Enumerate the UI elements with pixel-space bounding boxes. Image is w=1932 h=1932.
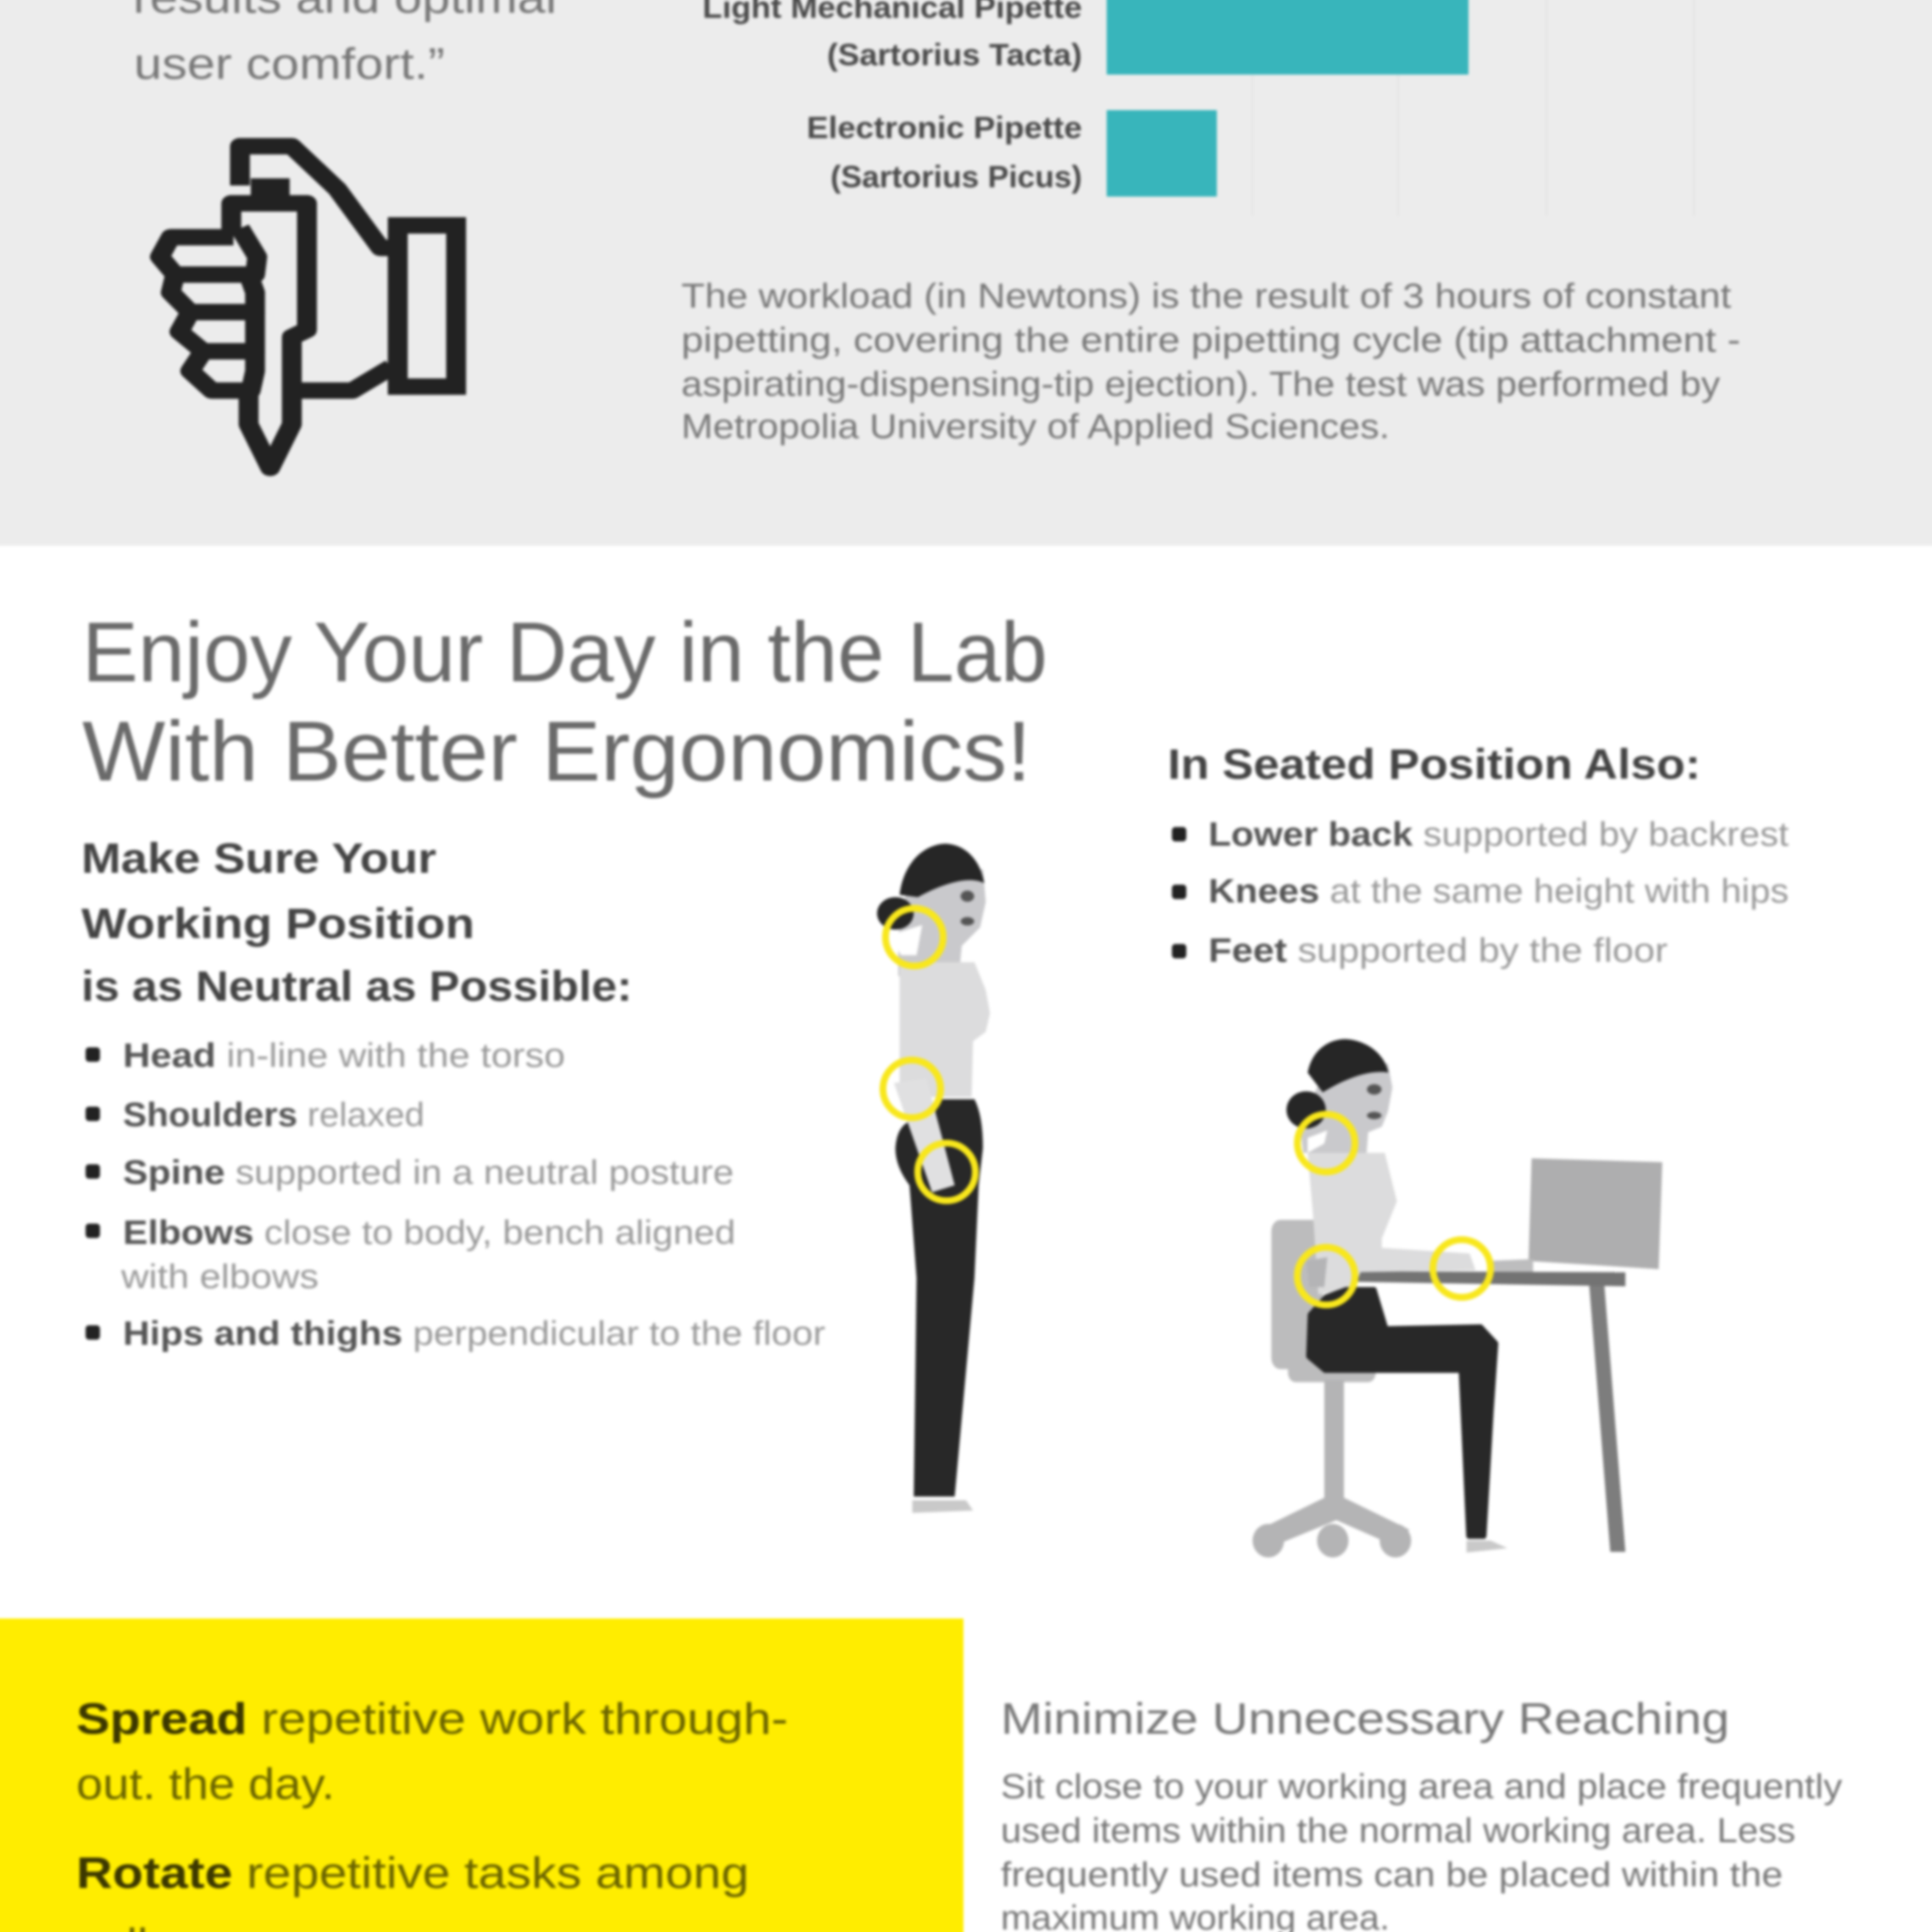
subheading: neutral working position: Make Sure Your xyxy=(81,835,436,882)
chart footnote paragraph: pipetting, covering the entire pipetting cycle (tip attachment - xyxy=(681,320,1740,359)
bar: electronic pipette xyxy=(1107,110,1217,197)
illustration: seated figure at desk xyxy=(1252,1039,1663,1557)
bar: light mechanical pipette xyxy=(1107,0,1468,75)
bar chart: workload in Newtons xyxy=(702,0,1694,216)
heading: Enjoy Your Day in the Lab xyxy=(82,605,1047,799)
illustration: standing figure xyxy=(877,844,990,1513)
list: neutral position checklist: with elbows xyxy=(120,1258,319,1296)
desk xyxy=(1589,1283,1625,1552)
tips text: Spread repetitive work through- xyxy=(76,1695,788,1744)
list: neutral position checklist: Elbows close to body, bench aligned xyxy=(123,1214,736,1252)
list: neutral position checklist: Hips and thighs perpendicular to the floor xyxy=(123,1315,825,1352)
tips text: Rotate repetitive tasks among xyxy=(76,1849,749,1898)
bar labels xyxy=(702,0,1082,194)
body xyxy=(1300,1063,1392,1152)
chart footnote paragraph: aspirating-dispensing-tip ejection). The test was performed by xyxy=(681,364,1721,403)
panel: minimize reaching xyxy=(1001,1695,1843,1932)
tips text xyxy=(76,1695,788,1932)
laptop xyxy=(1529,1158,1663,1269)
section paragraph: Sit close to your working area and place frequently xyxy=(1001,1767,1843,1806)
marker rings xyxy=(1297,1114,1491,1305)
list: neutral position checklist: Head in-line with the torso xyxy=(123,1037,565,1074)
subheading: seated position: In Seated Position Also: xyxy=(1168,741,1701,788)
panel: pipette comparison xyxy=(0,0,1932,546)
list: neutral position checklist: Spine supported in a neutral posture xyxy=(123,1154,734,1191)
chart footnote paragraph xyxy=(681,276,1740,446)
chart footnote paragraph: The workload (in Newtons) is the result of 3 hours of constant xyxy=(681,276,1732,315)
bar labels: Electronic Pipette xyxy=(807,110,1082,145)
panel: repetitive work tips xyxy=(0,1618,963,1932)
list: seated position checklist: Lower back supported by backrest xyxy=(1208,816,1789,853)
section heading: Minimize Unnecessary Reaching xyxy=(1001,1695,1729,1744)
chair xyxy=(1252,1220,1411,1557)
subheading: neutral working position xyxy=(81,835,632,1010)
quote text xyxy=(133,0,557,89)
list: seated position checklist: Knees at the same height with hips xyxy=(1208,873,1789,910)
section paragraph: frequently used items can be placed within the xyxy=(1001,1855,1783,1894)
section paragraph xyxy=(1001,1767,1843,1932)
list: neutral position checklist xyxy=(86,1037,825,1352)
icon: hand holding pipette xyxy=(160,147,456,468)
section paragraph: used items within the normal working area. Less xyxy=(1001,1811,1796,1850)
bar labels: (Sartorius Picus) xyxy=(830,159,1082,194)
bar labels: (Sartorius Tacta) xyxy=(827,37,1082,72)
list: seated position checklist: Feet supported by the floor xyxy=(1208,932,1668,969)
list: seated position checklist xyxy=(1172,816,1789,969)
marker rings xyxy=(883,908,975,1201)
list: neutral position checklist: Shoulders relaxed xyxy=(123,1096,425,1134)
quote text: user comfort.” xyxy=(134,40,445,89)
subheading: neutral working position: Working Position xyxy=(81,900,475,947)
heading: Enjoy Your Day in the Lab: With Better Ergonomics! xyxy=(82,704,1031,799)
heading: Enjoy Your Day in the Lab: Enjoy Your Day in the Lab xyxy=(82,605,1047,700)
subheading: neutral working position: is as Neutral as Possible: xyxy=(81,963,632,1010)
chart footnote paragraph: Metropolia University of Applied Sciences. xyxy=(681,407,1390,446)
tips text: out. the day. xyxy=(76,1760,335,1809)
